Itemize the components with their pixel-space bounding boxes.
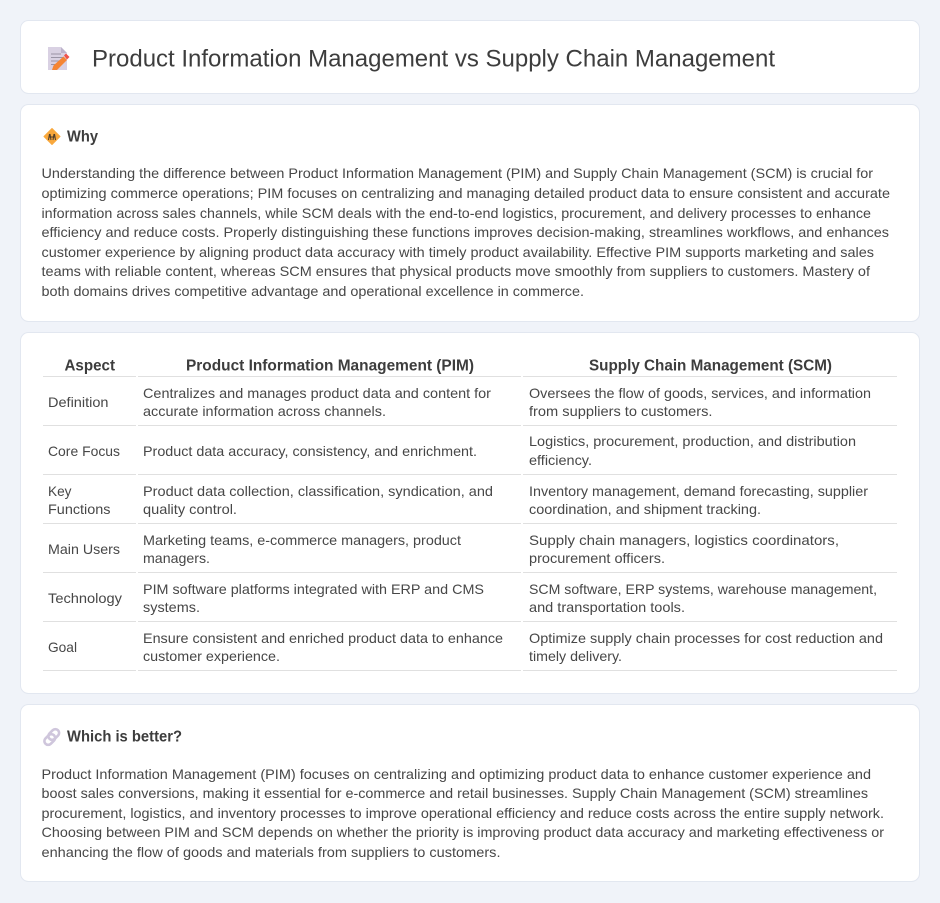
heading: why: Why xyxy=(67,128,98,146)
row: goal: Ensure consistent and enriched product data to enhance xyxy=(143,630,503,646)
text block: why paragraph: customer experience by aligning product data accuracy with timely product availability. Effective PIM supports marketing and sales xyxy=(42,244,874,260)
row: goal xyxy=(48,630,883,664)
icon: chain link xyxy=(43,728,61,746)
text block: which is better paragraph: Choosing between PIM and SCM depends on whether the priority is improving product data accuracy and marketing effectiveness or xyxy=(42,824,884,840)
panel: comparison table xyxy=(20,332,920,694)
icon: memo with pencil xyxy=(48,47,70,70)
heading: which is better: Which is better? xyxy=(67,728,182,746)
text block: which is better paragraph: Product Information Management (PIM) focuses on centralizing and optimizing product data to enhance customer experience and xyxy=(42,766,871,782)
row: key functions: coordination, and shipment tracking. xyxy=(529,501,761,517)
row: key functions: quality control. xyxy=(143,501,237,517)
panel: which is better xyxy=(20,704,920,882)
row: technology: and transportation tools. xyxy=(529,599,685,615)
row: technology: PIM software platforms integrated with ERP and CMS xyxy=(143,581,484,597)
text block: why paragraph: optimizing commerce operations; PIM focuses on centralizing and managing detailed product data to ensure consistent and accurate xyxy=(42,185,890,201)
row: definition: Centralizes and manages product data and content for xyxy=(143,385,491,401)
row: key functions: Functions xyxy=(48,501,110,517)
text block: why paragraph: both domains drives competitive advantage and operational excellence in commerce. xyxy=(42,283,584,299)
row: definition xyxy=(48,385,871,419)
row: goal: timely delivery. xyxy=(529,648,622,664)
row: technology: SCM software, ERP systems, warehouse management, xyxy=(529,581,877,597)
icon: diamond sign xyxy=(44,128,60,144)
row: definition: from suppliers to customers. xyxy=(529,403,712,419)
row: core focus xyxy=(48,433,856,468)
row: core focus: Logistics, procurement, production, and distribution xyxy=(529,433,856,449)
panel: header xyxy=(20,20,920,94)
table header row: Product Information Management (PIM) xyxy=(186,358,474,374)
row: definition: Oversees the flow of goods, services, and information xyxy=(529,385,871,401)
title: Product Information Management vs Supply Chain Management xyxy=(92,46,775,72)
text block: why paragraph: Understanding the difference between Product Information Management (PIM) and Supply Chain Management (SCM) is crucial for xyxy=(42,165,873,181)
row: technology: systems. xyxy=(143,599,200,615)
row: main users: managers. xyxy=(143,550,210,566)
row: key functions: Product data collection, classification, syndication, and xyxy=(143,483,493,499)
row: technology xyxy=(48,581,877,615)
row: definition: Definition xyxy=(48,394,108,410)
row: goal: Optimize supply chain processes for cost reduction and xyxy=(529,630,883,646)
row: main users: procurement officers. xyxy=(529,550,665,566)
row: technology: Technology xyxy=(48,590,122,606)
table header row: Supply Chain Management (SCM) xyxy=(589,358,832,374)
panel: why xyxy=(20,104,920,322)
text block: which is better paragraph: procurement, logistics, and inventory processes to improve operational efficiency and reduce costs across the entire supply network. xyxy=(42,805,884,821)
row: key functions: Inventory management, demand forecasting, supplier xyxy=(529,483,868,499)
text block: why paragraph: teams with reliable content, whereas SCM ensures that physical products move smoothly from suppliers to customers. Mastery of xyxy=(42,263,870,279)
row: definition: accurate information across channels. xyxy=(143,403,386,419)
row: goal: customer experience. xyxy=(143,648,280,664)
text block: why paragraph: efficiency and reduce costs. Properly distinguishing these functions improves decision-making, streamlines workflows, and enhances xyxy=(42,224,889,240)
row: core focus: Product data accuracy, consistency, and enrichment. xyxy=(143,443,477,459)
text block: why paragraph: information across sales channels, while SCM deals with the end-to-end logistics, procurement, and delivery processes to enhance xyxy=(42,205,871,221)
row: main users: Supply chain managers, logistics coordinators, xyxy=(529,532,839,548)
table header row: Aspect xyxy=(64,358,116,374)
row: goal: Goal xyxy=(48,639,77,655)
row: key functions xyxy=(48,483,868,517)
row: main users xyxy=(48,532,839,566)
text block: which is better paragraph: enhancing the flow of goods and materials from suppliers to customers. xyxy=(42,844,500,860)
row: core focus: efficiency. xyxy=(529,452,592,468)
text block: which is better paragraph xyxy=(42,766,884,860)
row: main users: Main Users xyxy=(48,541,120,557)
table header row xyxy=(64,358,832,374)
text block: why paragraph xyxy=(42,165,890,299)
row: main users: Marketing teams, e-commerce managers, product xyxy=(143,532,461,548)
row: core focus: Core Focus xyxy=(48,443,120,459)
text block: which is better paragraph: boost sales conversions, making it essential for e-commerce and retail businesses. Supply Chain Management (SCM) streamlines xyxy=(42,785,868,801)
row: key functions: Key xyxy=(48,483,72,499)
